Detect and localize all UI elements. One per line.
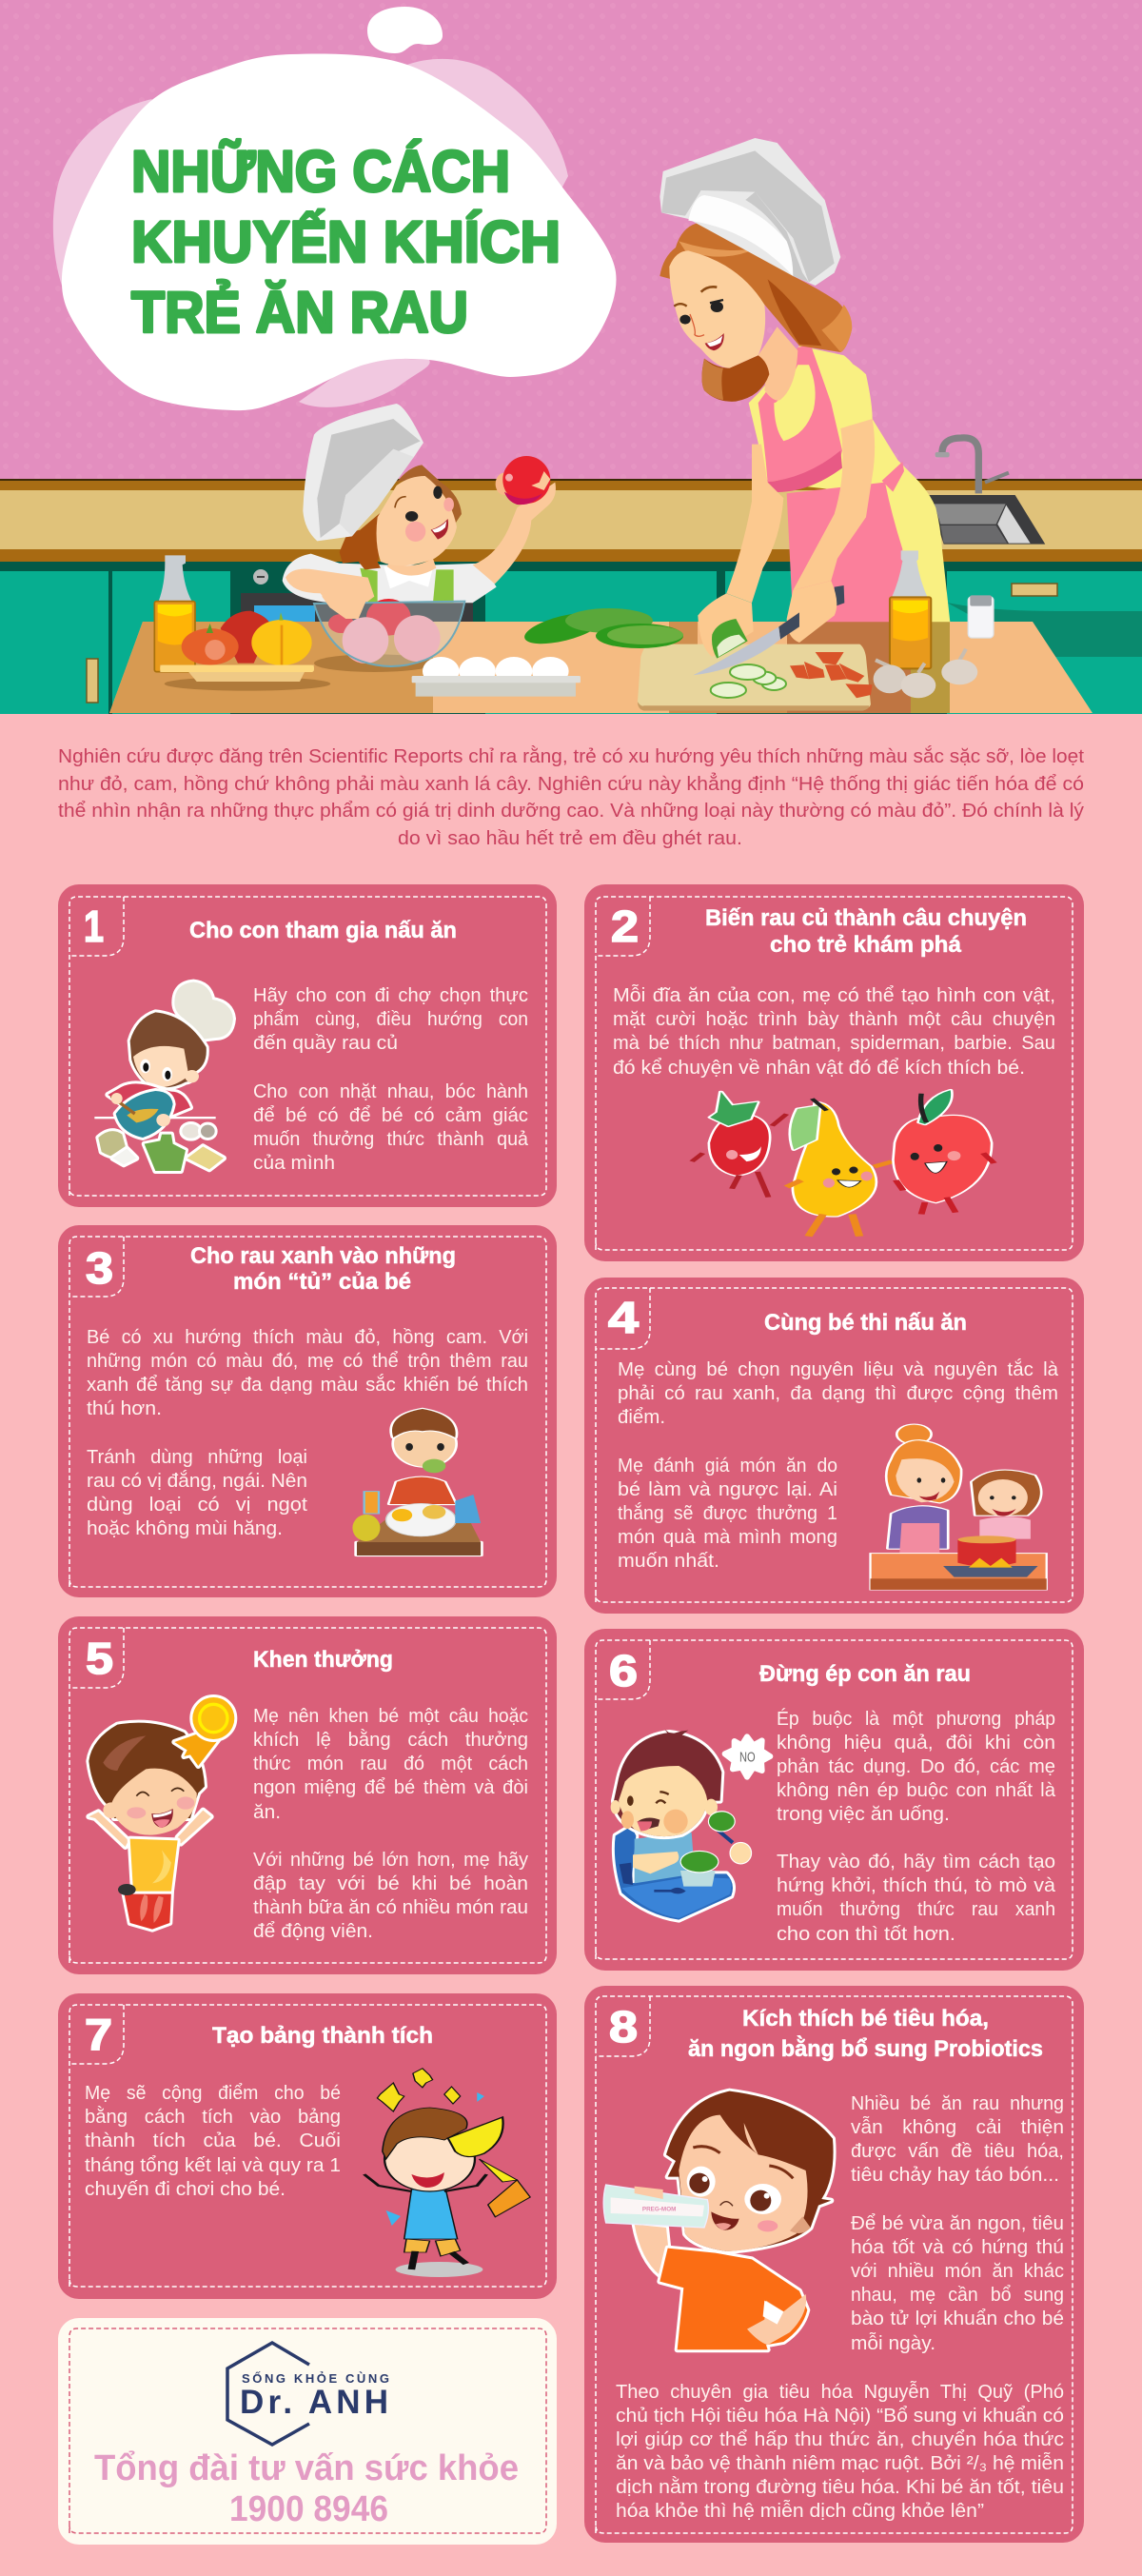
text block 8: expert quote: Theo chuyên gia tiêu hóa Nguyễn Thị Quỹ (Phó [616, 2381, 1064, 2403]
heading 3: món “tủ” của bé [233, 1269, 411, 1295]
panel 1: Cho con tham gia nấu ăn [58, 884, 557, 1207]
hotline text [94, 2448, 519, 2529]
icon: boy drinking probiotic bottle: PREG-MOM [642, 2207, 676, 2213]
number 1: 1 [84, 902, 104, 951]
text block 8: expert quote: lợi giúp cơ thể hấp thu thức ăn, chuyển hóa thức [616, 2429, 1064, 2450]
vegetables on plate [160, 611, 330, 691]
heading 2: cho trẻ khám phá [770, 932, 962, 958]
text block 2: mặt cười hoặc trình bày thành một câu chuyện [613, 1009, 1055, 1030]
oil bottle [890, 550, 931, 668]
heading 4: Cùng bé thi nấu ăn [764, 1310, 967, 1336]
strawberry [692, 1092, 787, 1198]
icon: mother and daughter cooking [871, 1425, 1047, 1590]
mother figure [660, 138, 950, 622]
text block 4: điểm. [618, 1407, 665, 1428]
text block 6: cho con thì tốt hơn. [777, 1924, 955, 1945]
text block 4: món quà mà mình mong [618, 1527, 837, 1548]
text block 7: thành tích của bé. Cuối [85, 2130, 341, 2151]
text block 5: khích lệ bằng cách thưởng [253, 1729, 528, 1751]
text block 5: thức món rau đó một cách [253, 1754, 528, 1774]
text block 3: Tránh dùng những loại [87, 1447, 307, 1468]
table [109, 622, 1093, 713]
text block 6: muốn thưởng thức rau xanh [777, 1899, 1055, 1920]
title blob [53, 7, 616, 410]
number 6: 6 [609, 1646, 638, 1695]
title: TRẺ ĂN RAU [131, 280, 468, 345]
icon: strawberry, pear and apple characters [692, 1090, 994, 1237]
hair [660, 222, 852, 402]
number 5: 5 [86, 1634, 113, 1683]
heading 2 [705, 905, 1027, 958]
footer panel: hotline [58, 2318, 557, 2545]
text block 5: ngon miệng để bé thèm và đòi [253, 1777, 528, 1798]
text block 8: được vấn đề tiêu hóa, [851, 2141, 1064, 2162]
text block 6: hứng khởi, thích thú, tò mò và [777, 1875, 1056, 1896]
panel 7: Tạo bảng thành tích [58, 1993, 557, 2299]
text block 2: mà bé thích như batman, spiderman, barbie. Sau [613, 1033, 1055, 1054]
arms [726, 419, 875, 603]
number 3: 3 [86, 1243, 113, 1293]
title: NHỮNG CÁCH [131, 139, 510, 204]
icon: jumping boy with medal [89, 1697, 234, 1930]
text block 4: thắng sẽ được thưởng 1 [618, 1502, 837, 1524]
text block 3: Bé có xu hướng thích màu đỏ, hồng cam. Với [87, 1327, 528, 1348]
text block 5 [253, 1706, 528, 1942]
apple [895, 1090, 994, 1215]
text block 6: không hiệu quả, đôi khi còn [777, 1733, 1055, 1754]
hotline text: Tổng đài tư vấn sức khỏe [94, 2448, 519, 2488]
child figure [154, 404, 581, 697]
text block 8: vẫn không cải thiện [851, 2116, 1064, 2138]
text block 4: bé làm và ngược lại. Ai [618, 1479, 837, 1500]
text block 8: expert quote: hóa khỏe thì hệ miễn dịch cũng khỏe lên” [616, 2500, 984, 2522]
title [131, 139, 561, 345]
text block 5: Mẹ nên khen bé một câu hoặc [253, 1706, 528, 1727]
text block 1: muốn thưởng thức thành quả [253, 1129, 529, 1150]
text block 7: chuyến đi chơi cho bé. [85, 2179, 286, 2200]
text block 1: để bé có để bé có cảm giác [253, 1105, 528, 1126]
left arm [286, 569, 374, 619]
tomato pieces [790, 652, 873, 698]
kitchen wall and cabinets [0, 479, 1142, 714]
panel 3: Cho rau xanh vào những món tủ của bé [58, 1225, 557, 1597]
text block 8: expert quote [616, 2381, 1064, 2522]
hands, knife and cutting board [638, 550, 994, 711]
text block 1: phẩm cùng, điều hướng con [253, 1009, 528, 1030]
text block 8: expert quote: dịch nằm trong đường tiêu hóa. Khi bé ăn tốt, tiêu [616, 2476, 1064, 2498]
salt shaker [968, 595, 994, 638]
logo: Sống khỏe cùng Dr. Anh: Dr. ANH [240, 2384, 388, 2421]
text block 8: nhau, mẹ cần bổ sung [851, 2285, 1064, 2306]
garlic [874, 649, 977, 698]
text block 8: mỗi ngày. [851, 2332, 935, 2354]
intro paragraph: thể nhìn nhận ra những thực phẩm có giá trị dinh dưỡng cao. Và những loại này thường có màu đỏ”. Đó chính là lý [58, 801, 1084, 822]
text block 5: ăn. [253, 1802, 281, 1823]
left hand with cucumber [698, 593, 754, 659]
text block 6: Thay vào đó, hãy tìm cách tạo [777, 1852, 1055, 1873]
text block 3: thú hơn. [87, 1398, 162, 1419]
intro paragraph: do vì sao hầu hết trẻ em đều ghét rau. [398, 828, 742, 849]
text block 3: xanh để tăng sự đa dạng màu sắc khiến bé thích [87, 1374, 528, 1396]
heading 5: Khen thưởng [253, 1647, 393, 1673]
text block 4: Mẹ cùng bé chọn nguyên liệu và nguyên tắc là [618, 1358, 1059, 1380]
intro paragraph: như đỏ, cam, hồng chứ không phải màu xanh lá cây. Nghiên cứu này khẳng định “Hệ thống thị giác tiến hóa để có [58, 772, 1084, 795]
chef hat [303, 404, 423, 541]
logo: Sống khỏe cùng Dr. Anh: SỐNG KHỎE CÙNG [242, 2371, 389, 2386]
number 7: 7 [85, 2010, 112, 2059]
heading 8 [688, 2006, 1043, 2062]
cucumber slices on table [522, 606, 683, 650]
text block 6: không nên ép buộc con nhất là [777, 1780, 1056, 1801]
text block 6: phản tác dụng. Do đó, các mẹ [777, 1756, 1055, 1777]
text block 1: Cho con nhặt nhau, bóc hành [253, 1081, 528, 1102]
text block 4: phải có rau xanh, đa dạng thì được cộng thêm [618, 1383, 1058, 1404]
heading 7: Tạo bảng thành tích [212, 2023, 433, 2049]
intro paragraph: Nghiên cứu được đăng trên Scientific Reports chỉ ra rằng, trẻ có xu hướng yêu thích những màu sắc sặc sỡ, lòe loẹt [58, 745, 1084, 767]
icon: boy refusing broccoli [611, 1730, 770, 1920]
text block 3: những món có màu đó, mẹ có thể trộn thêm rau [87, 1351, 528, 1372]
text block 4: muốn nhất. [618, 1551, 719, 1572]
text block 7: Mẹ sẽ cộng điểm cho bé [85, 2083, 341, 2104]
panel 4: Cùng bé thi nấu ăn [584, 1278, 1084, 1614]
text block 8: bào tử lợi khuẩn cho bé [851, 2308, 1064, 2329]
text block 2: Mỗi đĩa ăn của con, mẹ có thể tạo hình con vật, [613, 984, 1055, 1006]
text block 8: hóa tốt và có hứng thú [851, 2237, 1064, 2258]
raised arm and tomato [473, 456, 556, 584]
text block 7 [85, 2083, 341, 2200]
face [377, 476, 457, 565]
text block 2: đó kể chuyện về nhân vật đó để kích thích bé. [613, 1058, 1025, 1079]
icon: happy boy holding trophy [364, 2069, 530, 2277]
text block 8: Để bé vừa ăn ngon, tiêu [851, 2213, 1064, 2234]
icon: boy eating at table [352, 1409, 481, 1556]
text block 5: thành bữa ăn có nhiều món rau [253, 1897, 528, 1918]
hotline text: 1900 8946 [229, 2489, 388, 2529]
icon: boy refusing broccoli: NO [739, 1751, 756, 1766]
text block 5: đập tay với bé khi bé hoàn [253, 1873, 528, 1894]
text block 7: bằng cách tích vào bảng [85, 2106, 341, 2128]
shirt [283, 554, 497, 603]
glass bowl with tomatoes [314, 578, 464, 672]
egg carton [412, 657, 581, 697]
number 8: 8 [609, 2002, 638, 2051]
text block 3: dùng loại có vị ngọt [87, 1495, 307, 1516]
cucumber slices [711, 664, 786, 698]
text block 4 [618, 1358, 1059, 1572]
text block 3 [87, 1327, 528, 1539]
shirt and apron [749, 327, 950, 622]
oil bottle [154, 555, 195, 672]
text block 3: hoặc không mùi hăng. [87, 1518, 283, 1539]
text block 6 [777, 1708, 1056, 1945]
right hand and knife [693, 581, 844, 675]
text block 6: trong việc ăn uống. [777, 1804, 950, 1825]
icon: boy drinking probiotic bottle [603, 2091, 834, 2349]
face [669, 250, 765, 368]
pear [787, 1099, 892, 1237]
text block 2 [613, 984, 1055, 1079]
panel 5: Khen thưởng [58, 1616, 557, 1974]
text block 8: với nhiều món ăn khác [851, 2261, 1064, 2282]
icon: sink and faucet [928, 438, 1045, 545]
text block 8 [851, 2093, 1064, 2354]
number 4: 4 [608, 1293, 640, 1342]
title: KHUYẾN KHÍCH [131, 209, 561, 274]
neck and hair [340, 465, 462, 576]
text block 1: Hãy cho con đi chợ chọn thực [253, 985, 528, 1006]
text block 8: expert quote: ăn và bảo vệ thành niêm mạc ruột. Bởi ²/₃ hệ miễn [616, 2452, 1064, 2474]
heading 3: Cho rau xanh vào những [190, 1243, 456, 1269]
text block 5: Với những bé lớn hơn, mẹ hãy [253, 1850, 528, 1871]
text block 1: của mình [253, 1153, 335, 1174]
text block 8: expert quote: chủ tịch Hội tiêu hóa Hà Nội) “Bổ sung vi khuẩn có [616, 2406, 1064, 2427]
text block 8: tiêu chảy hay táo bón... [851, 2165, 1059, 2186]
chef hat [660, 138, 840, 286]
heading 3 [190, 1243, 456, 1295]
text block 1 [253, 985, 529, 1174]
heading 6: Đừng ép con ăn rau [759, 1661, 971, 1687]
heading 2: Biến rau củ thành câu chuyện [705, 905, 1027, 931]
text block 1: đến quầy rau củ [253, 1033, 398, 1054]
hero illustration: mother and child cooking [0, 0, 1142, 714]
text block 4: Mẹ đánh giá món ăn do [618, 1456, 837, 1476]
text block 5: để động viên. [253, 1921, 373, 1942]
intro paragraph [58, 745, 1084, 849]
heading 1: Cho con tham gia nấu ăn [189, 918, 457, 943]
logo: Sống khỏe cùng Dr. Anh [227, 2343, 389, 2445]
heading 8: ăn ngon bằng bổ sung Probiotics [688, 2035, 1043, 2062]
heading 8: Kích thích bé tiêu hóa, [742, 2006, 989, 2031]
text block 8: Nhiều bé ăn rau nhưng [851, 2093, 1064, 2114]
text block 6: Ép buộc là một phương pháp [777, 1708, 1055, 1730]
panel 6: Đừng ép con ăn rau [584, 1629, 1084, 1971]
text block 7: tháng tổng kết lại và quy ra 1 [85, 2155, 341, 2176]
panel 8: Kích thích bé tiêu hóa, ăn ngon bằng bổ sung Probiotics [584, 1986, 1084, 2543]
text block 3: rau có vị đắng, ngái. Nên [87, 1470, 307, 1492]
number 2: 2 [611, 902, 639, 951]
icon: boy with chef hat mixing a bowl [94, 982, 233, 1171]
panel 2: Biến rau củ thành câu chuyện cho trẻ khám phá [584, 884, 1084, 1261]
